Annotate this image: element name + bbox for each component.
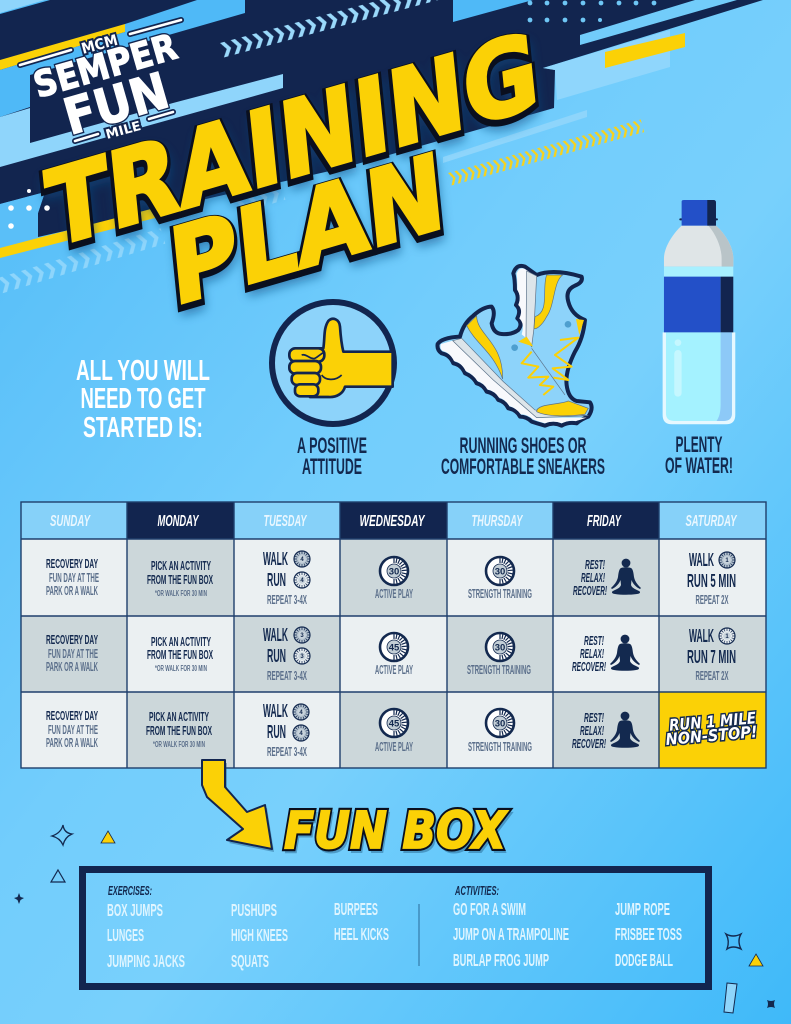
column: Tuesday walk run: REPEAT 3-4X	[267, 592, 307, 607]
column: Sunday recovery days	[46, 556, 99, 750]
activities: ACTIVITIES:	[454, 884, 499, 898]
chevrons right of title	[233, 184, 285, 214]
column: Friday rest	[572, 558, 641, 751]
activities: JUMP ROPE	[615, 899, 670, 919]
column: Tuesday walk run: REPEAT 3-4X	[267, 668, 307, 683]
training calendar table: FUN DAY AT THE	[49, 570, 99, 585]
column: Saturday: REPEAT 2X	[696, 668, 729, 683]
icon captions: OF WATER!	[665, 453, 733, 478]
training calendar table: FUN DAY AT THE	[48, 722, 98, 737]
column: Wednesday active play: 45	[389, 718, 400, 730]
dots	[528, 1, 656, 22]
column: Friday rest: REST!	[585, 558, 605, 572]
column: Monday fun box: *OR WALK FOR 30 MIN	[153, 740, 205, 749]
back sole	[517, 268, 534, 342]
icon: running shoes	[437, 266, 592, 426]
icon captions: PLENTY	[676, 432, 723, 457]
column: Tuesday walk run: WALK	[263, 625, 288, 645]
column: Friday rest: REST!	[584, 711, 604, 725]
column: Thursday strength training	[467, 557, 532, 754]
title shadow	[43, 18, 545, 338]
column: Monday fun box: PICK AN ACTIVITY	[149, 709, 209, 724]
logo text: MCM	[79, 31, 120, 58]
chevrons lower left	[0, 228, 165, 293]
logo text: MILE	[104, 119, 143, 143]
icon captions: A POSITIVE	[297, 433, 367, 458]
column: Monday fun box: FROM THE FUN BOX	[147, 647, 213, 662]
callout: run 1 mile non-stop: NON-STOP!	[665, 722, 758, 749]
logo text	[29, 27, 182, 147]
column: Monday fun box: FROM THE FUN BOX	[146, 723, 212, 738]
logo: MCM Semper Fun Mile	[20, 20, 182, 147]
column: Wednesday active play	[375, 557, 413, 754]
exercises: BURPEES	[334, 899, 378, 919]
exercises: HEEL KICKS	[334, 924, 389, 944]
table header row: SUNDAY	[50, 513, 91, 530]
column: Saturday: 1	[725, 634, 729, 640]
activities: FRISBEE TOSS	[615, 924, 682, 944]
logo: MCM Semper Fun Mile: SEMPER	[29, 27, 182, 107]
table header row: FRIDAY	[587, 513, 622, 530]
title: Training Plan	[41, 9, 545, 338]
column: Tuesday walk run	[263, 549, 310, 759]
table cell fills	[21, 502, 766, 768]
table header row	[21, 502, 766, 539]
column: Saturday: REPEAT 2X	[696, 592, 729, 607]
exercises	[107, 884, 389, 971]
table header row: THURSDAY	[472, 513, 523, 530]
column: Monday fun box: *OR WALK FOR 30 MIN	[155, 664, 207, 673]
heading: Fun Box: FUN BOX	[286, 805, 510, 864]
exercises: PUSHUPS	[231, 900, 277, 920]
column: Monday fun box	[146, 558, 213, 749]
chevrons upper	[220, 0, 456, 57]
training calendar table: FUN DAY AT THE	[48, 646, 98, 661]
logo text: SEMPER	[29, 27, 182, 107]
column: Friday rest: RECOVER!	[572, 660, 606, 674]
panel: fun box list	[82, 870, 708, 986]
yellow accents	[467, 316, 503, 379]
activities: DODGE BALL	[615, 950, 673, 970]
intro text	[76, 355, 210, 444]
column: Monday fun box: PICK AN ACTIVITY	[151, 634, 211, 649]
column: Friday rest: RECOVER!	[573, 584, 607, 598]
logo: MCM Semper Fun Mile: FUN	[57, 62, 175, 147]
small clocks: 4	[299, 710, 303, 716]
title outline and fill: PLAN	[164, 133, 449, 332]
training calendar table: PARK OR A WALK	[46, 659, 98, 674]
callout: run 1 mile non-stop	[665, 708, 758, 749]
column: Friday rest: RELAX!	[580, 647, 604, 661]
column: Friday rest: RELAX!	[580, 724, 604, 738]
arrow to fun box	[202, 760, 274, 852]
training calendar table: ACTIVE PLAY	[375, 586, 413, 601]
column: Friday rest: REST!	[584, 634, 604, 648]
column: Thursday strength training: 30	[495, 566, 505, 578]
column: Sunday recovery days: RECOVERY DAY	[46, 556, 98, 571]
column: Tuesday walk run: REPEAT 3-4X	[267, 744, 307, 759]
chevrons yellow	[448, 120, 644, 186]
exercises: EXERCISES:	[108, 884, 152, 898]
meditating figures	[610, 559, 641, 748]
icon: water bottle	[663, 200, 735, 424]
table header row: TUESDAY	[264, 513, 307, 530]
icon: thumbs up	[272, 302, 394, 424]
column: Tuesday walk run: RUN	[267, 722, 286, 742]
title: Training Plan: PLAN	[164, 130, 449, 329]
title shadow: TRAINING	[43, 18, 545, 280]
column: Tuesday walk run: WALK	[263, 701, 288, 721]
header graphic bands	[0, 0, 763, 293]
front sole	[440, 341, 587, 423]
column: Sunday recovery days: RECOVERY DAY	[46, 708, 98, 723]
column: Saturday	[687, 550, 736, 683]
column: Monday fun box: FROM THE FUN BOX	[147, 572, 213, 587]
column: Thursday strength training: 30	[495, 718, 505, 730]
small clocks	[293, 551, 310, 741]
column: Tuesday walk run: RUN	[267, 646, 286, 666]
column: Saturday: RUN 7 MIN	[687, 647, 736, 667]
column: Saturday: WALK	[689, 626, 714, 646]
activities: JUMP ON A TRAMPOLINE	[453, 924, 569, 944]
column: Saturday: RUN 5 MIN	[687, 571, 736, 591]
small clocks: 4	[300, 557, 304, 563]
column: Monday fun box: PICK AN ACTIVITY	[151, 558, 211, 573]
small clocks: 3	[300, 654, 304, 660]
column: Wednesday active play: 30	[389, 566, 399, 578]
column: Monday fun box: *OR WALK FOR 30 MIN	[155, 589, 207, 598]
column: Wednesday active play: 45	[389, 642, 400, 654]
icon captions: COMFORTABLE SNEAKERS	[441, 454, 605, 479]
activities	[453, 884, 682, 970]
intro text: ALL YOU WILL	[76, 355, 210, 387]
training calendar table: STRENGTH TRAINING	[468, 739, 532, 754]
training calendar table: ACTIVE PLAY	[375, 662, 413, 677]
column: Tuesday walk run: RUN	[267, 570, 286, 590]
table header row: MONDAY	[158, 513, 199, 530]
column: Tuesday walk run: WALK	[263, 549, 288, 569]
title shadow: PLAN	[166, 139, 451, 338]
laces	[522, 338, 578, 395]
training calendar table: ACTIVE PLAY	[375, 739, 413, 754]
exercises: SQUATS	[231, 951, 269, 971]
icon captions: ATTITUDE	[302, 454, 362, 479]
small clocks: 3	[300, 633, 304, 639]
icon captions	[297, 432, 733, 479]
column: Saturday: 1	[725, 558, 729, 564]
column: Thursday strength training: 30	[495, 642, 505, 654]
heading: Fun Box: FUN BOX	[284, 802, 508, 861]
training calendar table: PARK OR A WALK	[46, 583, 98, 598]
training calendar table	[21, 502, 766, 768]
column: Friday rest: RELAX!	[581, 571, 605, 585]
exercises: HIGH KNEES	[231, 925, 288, 945]
small clocks: 4	[299, 731, 303, 737]
intro text: NEED TO GET	[80, 383, 206, 415]
training calendar table: PARK OR A WALK	[46, 735, 98, 750]
heading: Fun Box: FUN BOX	[284, 802, 508, 861]
exercises: BOX JUMPS	[107, 900, 163, 920]
column: Friday rest: RECOVER!	[572, 737, 606, 751]
table header row: WEDNESDAY	[360, 513, 425, 530]
small clocks: 4	[300, 578, 304, 584]
training calendar table: STRENGTH TRAINING	[468, 586, 532, 601]
decorative shapes	[14, 825, 775, 1013]
icon captions: RUNNING SHOES OR	[460, 433, 587, 458]
logo bars	[20, 20, 181, 141]
table header row: SATURDAY	[686, 513, 737, 530]
activities: BURLAP FROG JUMP	[453, 950, 549, 970]
column: Sunday recovery days: RECOVERY DAY	[46, 632, 98, 647]
intro text: STARTED IS:	[83, 412, 203, 444]
activities: GO FOR A SWIM	[453, 899, 526, 919]
column: Saturday: WALK	[689, 550, 714, 570]
training calendar table: STRENGTH TRAINING	[467, 662, 531, 677]
logo text: FUN	[57, 62, 175, 147]
callout: run 1 mile non-stop: RUN 1 MILE	[668, 708, 757, 735]
exercises: LUNGES	[107, 925, 144, 945]
exercises: JUMPING JACKS	[107, 951, 185, 971]
